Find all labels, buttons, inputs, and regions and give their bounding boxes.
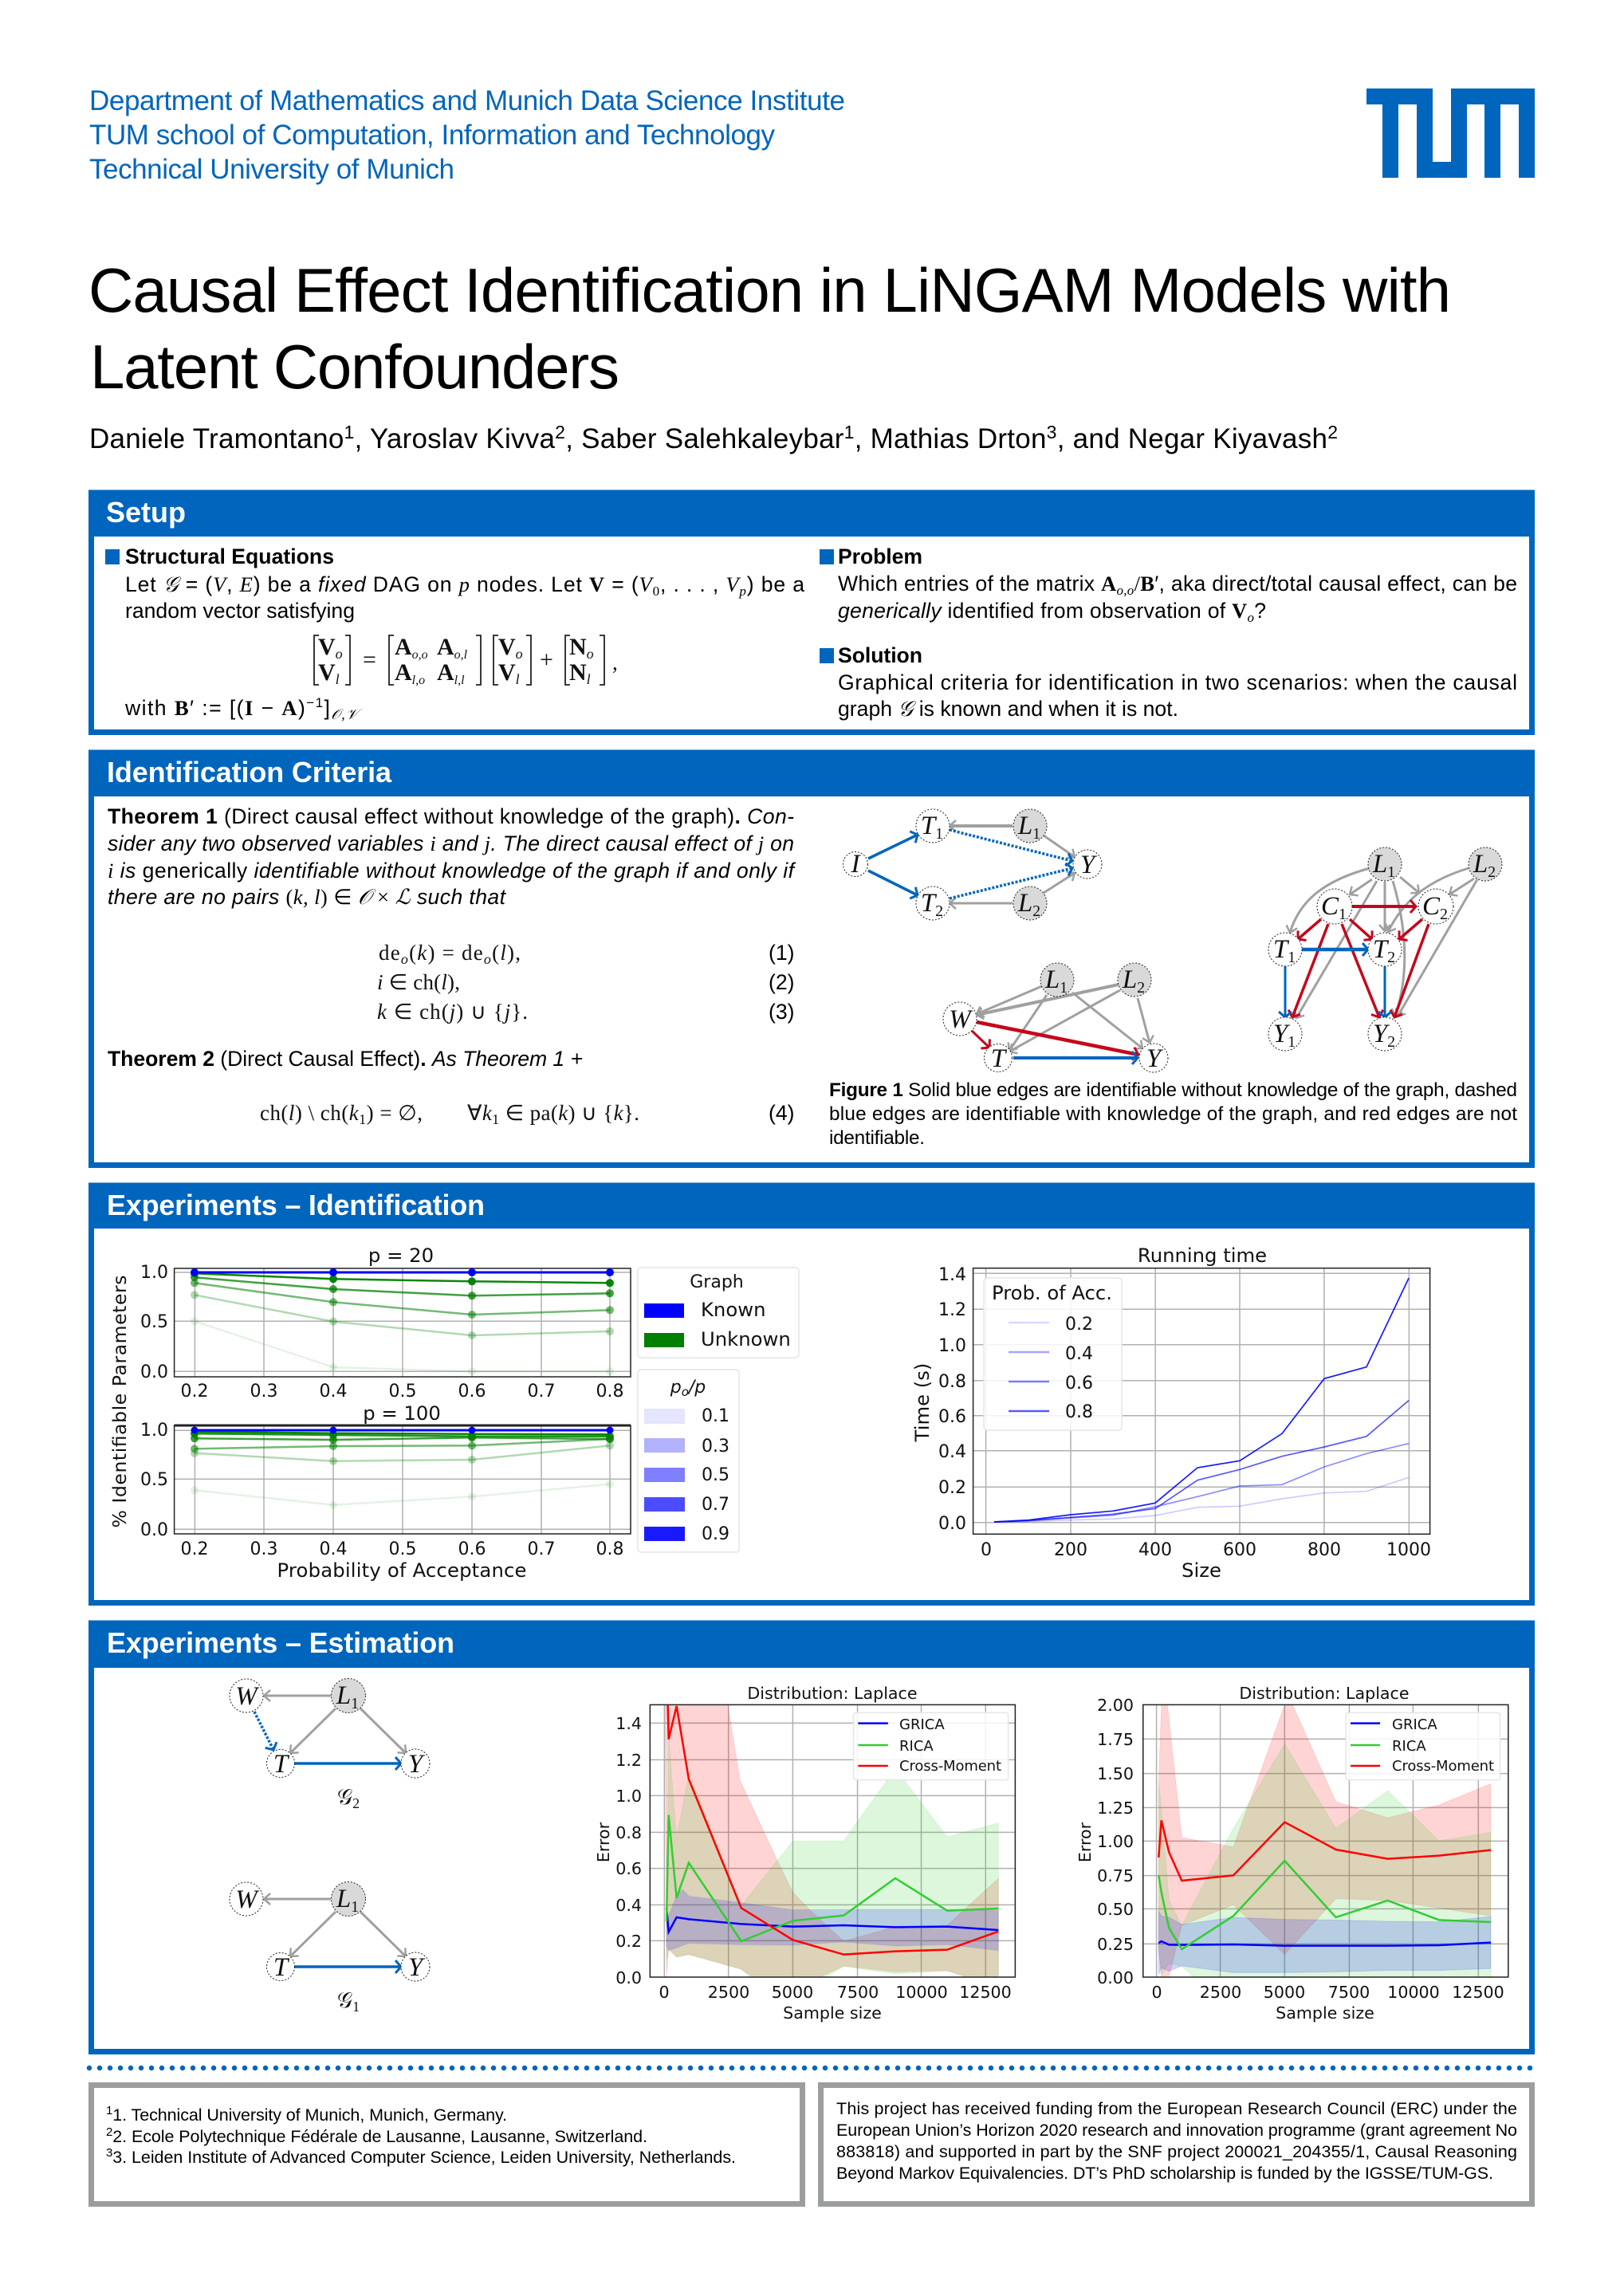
graph: G2: T (273, 1750, 290, 1779)
graph: top-left IV: T (921, 889, 935, 918)
graph: G1: T (273, 1953, 290, 1982)
authors: 3 (1047, 422, 1056, 442)
affiliation header (89, 85, 845, 185)
block: structural equations: ] (324, 696, 330, 720)
chart: laplace error 2: Sample size (1276, 2003, 1374, 2023)
legend: graph: Graph (690, 1272, 744, 1292)
footer: funding: European Union’s Horizon 2020 research and innovation programme (grant agreement No (836, 2121, 1517, 2140)
block: problem (820, 545, 1517, 625)
chart: laplace error 2: 2.00 (1097, 1696, 1134, 1715)
chart: p = 100: 0.2 (180, 1539, 209, 1559)
block: problem: generically identified from observation of V (838, 599, 1247, 623)
chart: p = 100: 0.3 (250, 1539, 277, 1559)
legend: po/p: /p (687, 1378, 706, 1398)
equation: structural matrix: N (569, 659, 587, 686)
equation 4: ) = ∅, (367, 1101, 423, 1125)
block: problem: B′, aka direct/total causal effect, can be (1140, 572, 1517, 596)
equation: structural matrix: o (516, 646, 523, 662)
footer: funding: 883818) and supported in part by the SNF project 200021_204355/1, Causal Reasoning (836, 2142, 1517, 2161)
graph: G1: 1 (351, 1898, 359, 1916)
chart: p = 20: 0.6 (458, 1382, 486, 1402)
chart: laplace error 1: 0.6 (615, 1859, 642, 1878)
chart: running time: 600 (1223, 1540, 1256, 1560)
title (88, 255, 1451, 402)
footer: funding (821, 2086, 1532, 2204)
equations 1 to 3: i ∈ ch(l), (377, 970, 460, 994)
chart: p = 100: 0.7 (528, 1539, 555, 1559)
figure caption: blue edges are identifiable with knowledge of the graph, and red edges are not (829, 1103, 1517, 1125)
authors: 2 (555, 422, 565, 442)
chart: laplace error 1: 2500 (708, 1983, 749, 2002)
chart: running time: Running time (1138, 1244, 1267, 1267)
chart: p = 100: Probability of Acceptance (277, 1559, 526, 1582)
chart: p = 100: 0.8 (596, 1539, 623, 1559)
legend: probability of acceptance: 0.4 (1065, 1344, 1093, 1364)
theorem 2: Theorem 2 (Direct Causal Effect). As Theorem 1 + (108, 1047, 583, 1071)
legend: probability of acceptance: 0.6 (1065, 1374, 1093, 1394)
graph: right C T Y: 1 (1288, 949, 1296, 966)
block: structural equations: with B′ := [(I − A) (125, 696, 305, 720)
equations 1 to 3: k ∈ ch(j) ∪ {j}. (377, 1000, 528, 1024)
graph: G2 (230, 1679, 430, 1811)
theorem 1: there are no pairs (k, l) ∈ 𝒪 × ℒ such that (108, 885, 507, 909)
chart: laplace error 1: Distribution: Laplace (747, 1684, 918, 1703)
figure caption (829, 1079, 1517, 1149)
chart: laplace error 2: 12500 (1452, 1983, 1504, 2002)
graph: right C T Y: 2 (1387, 1033, 1395, 1051)
heading: experiments estimation: Experiments – Estimation (107, 1626, 454, 1659)
footer: affiliations: 1. Technical University of Munich, Munich, Germany. (112, 2105, 507, 2125)
authors: , Mathias Drton (855, 423, 1046, 454)
legend: po/p: 0.9 (702, 1524, 729, 1544)
graph: bottom W T Y: L (1045, 965, 1060, 994)
panel: identification criteria (88, 749, 1535, 1166)
chart: running time: Size (1182, 1559, 1221, 1582)
equation: structural matrix: l (516, 671, 520, 687)
chart: laplace error 1: 0.8 (615, 1823, 642, 1842)
graph: right C T Y: Y (1373, 1020, 1387, 1048)
chart: running time: 0.2 (938, 1478, 966, 1498)
graph: G1: W (235, 1885, 259, 1914)
chart: p = 20: p = 20 (368, 1244, 434, 1267)
graph: bottom W T Y (943, 963, 1168, 1073)
equation: structural matrix: = (363, 647, 376, 673)
graph: top-left IV: L (1018, 812, 1032, 840)
chart: laplace error 1: 1.4 (615, 1714, 642, 1733)
chart: p = 100: 0.5 (140, 1470, 168, 1490)
graph: top-left IV: Y (1080, 851, 1098, 879)
block: solution: Graphical criteria for identification in two scenarios: when the causal (838, 670, 1517, 694)
legend: po/p: 0.5 (702, 1465, 729, 1485)
panel: setup (88, 489, 1535, 732)
chart: laplace error 1: 7500 (837, 1983, 879, 2002)
title: Latent Confounders (90, 332, 619, 402)
block: structural equations: −1 (306, 695, 323, 710)
equation 4: 1 (359, 1111, 366, 1127)
chart: laplace error 2: 0 (1151, 1983, 1162, 2002)
chart: running time: 400 (1138, 1540, 1172, 1560)
authors: 2 (1327, 422, 1338, 442)
legend: po/p: 0.3 (702, 1437, 729, 1457)
graph: G2: L (336, 1681, 351, 1710)
chart: running time: 800 (1307, 1540, 1341, 1560)
chart: laplace error 2: GRICA (1392, 1716, 1437, 1733)
block: problem: ? (1254, 599, 1266, 623)
authors: , and Negar Kiyavash (1057, 423, 1327, 454)
equations 1 to 3: de (379, 941, 400, 965)
figure caption: identifiable. (829, 1127, 925, 1149)
legend: graph: Known (701, 1298, 765, 1321)
footer: affiliations (91, 2086, 802, 2204)
affiliation header: Technical University of Munich (89, 154, 454, 185)
graph: G2: W (235, 1682, 259, 1711)
equation: structural matrix: o (336, 646, 343, 662)
block: problem: / (1134, 572, 1141, 596)
graph: top-left IV: 2 (935, 902, 943, 920)
legend: po/p: o (682, 1385, 689, 1399)
chart: laplace error 1: 0 (659, 1983, 670, 2002)
legend: po/p: 0.7 (702, 1495, 729, 1515)
heading: identification criteria: Identification Criteria (107, 756, 392, 788)
graph: top-left IV: 1 (935, 825, 943, 843)
chart: p = 20: 0.3 (250, 1382, 277, 1402)
chart: laplace error 2: Distribution: Laplace (1239, 1684, 1410, 1703)
graph: bottom W T Y: T (991, 1044, 1008, 1073)
block: structural equations: ) be a (747, 572, 804, 596)
graph: right C T Y: C (1422, 892, 1440, 921)
chart: laplace error 1 (594, 1677, 1015, 2023)
block: problem: Which entries of the matrix A (838, 572, 1116, 596)
authors: 1 (344, 422, 354, 442)
chart: laplace error 1: 0.4 (615, 1896, 642, 1915)
equations 1 to 3: ( (409, 941, 416, 965)
chart: p = 20: 0.0 (140, 1362, 168, 1382)
graph: right C T Y: T (1373, 935, 1387, 964)
equation: structural matrix: A (437, 659, 454, 686)
graph: right C T Y: 2 (1488, 863, 1496, 881)
chart: running time (910, 1244, 1431, 1582)
graph: right C T Y: Y (1273, 1020, 1288, 1048)
legend: po/p: 0.1 (702, 1406, 729, 1426)
chart: p = 20: 0.5 (389, 1382, 416, 1402)
chart: p = 20: 0.4 (319, 1382, 348, 1402)
chart: laplace error 2: 1.25 (1097, 1799, 1134, 1818)
equation: structural matrix: V (498, 659, 516, 686)
equation: structural matrix: l,l (454, 674, 465, 687)
graph: right C T Y: L (1473, 850, 1488, 879)
chart: p = 20: 0.5 (140, 1312, 168, 1332)
equation: structural matrix: N (569, 634, 587, 660)
chart: p = 100: 0.0 (140, 1520, 168, 1540)
graph: top-left IV: I (850, 850, 861, 879)
block: structural equations: p (738, 584, 746, 599)
chart: p = 20 (140, 1244, 631, 1402)
chart: laplace error 1: 5000 (772, 1983, 813, 2002)
chart: laplace error 2: Error (1075, 1822, 1095, 1862)
footer: affiliations: 1 (106, 2104, 112, 2117)
legend: probability of acceptance (984, 1278, 1122, 1430)
graph: right C T Y: L (1373, 850, 1387, 879)
graph: G2: Y (408, 1750, 426, 1779)
chart: running time: 1.4 (938, 1265, 966, 1285)
block: structural equations: V (725, 572, 741, 596)
title: Causal Effect Identification in LiNGAM Models with (88, 255, 1451, 325)
legend: probability of acceptance: 0.2 (1065, 1315, 1093, 1335)
equations 1 to 3 (377, 941, 795, 1024)
panel: experiments identification (88, 1183, 1535, 1602)
authors: , Saber Salehkaleybar (565, 423, 844, 454)
chart: laplace error 2: 0.25 (1097, 1935, 1134, 1954)
chart: running time: 200 (1054, 1540, 1087, 1560)
chart: laplace error 1: Sample size (783, 2003, 882, 2023)
graph: right C T Y: 1 (1387, 863, 1395, 881)
chart: laplace error 1: 1.0 (615, 1787, 642, 1806)
chart: p = 100: 1.0 (140, 1421, 168, 1441)
equation: structural matrix: + (540, 647, 553, 673)
block: structural equations: 𝒪,𝒱 (331, 706, 363, 722)
chart: running time: 0.4 (938, 1442, 966, 1462)
chart: running time: 0 (981, 1540, 992, 1560)
block: structural equations: Let 𝒢 = (V, E) be a fixed DAG on p nodes. Let V = (V (125, 572, 652, 596)
chart: laplace error 2: 10000 (1387, 1983, 1440, 2002)
authors: 1 (844, 422, 854, 442)
equations 1 to 3: l), (500, 941, 521, 965)
block: solution: graph 𝒢 is known and when it is not. (838, 697, 1178, 721)
chart: p = 20: 1.0 (140, 1263, 168, 1283)
chart: p = 100: 0.4 (319, 1539, 348, 1559)
chart: running time: 1.0 (938, 1336, 966, 1356)
chart: laplace error 1: 12500 (959, 1983, 1012, 2002)
graph: bottom W T Y: W (949, 1005, 973, 1034)
graph: G1: 1 (352, 1999, 360, 2015)
equations 1 to 3: k) = de (417, 941, 483, 965)
equation: structural matrix: V (318, 659, 336, 686)
chart: laplace error 1: 0.2 (615, 1932, 642, 1951)
graph: right C T Y: C (1321, 892, 1339, 921)
chart: laplace error 1: RICA (899, 1738, 934, 1755)
graph: bottom W T Y: Y (1146, 1044, 1164, 1073)
chart: running time: 0.0 (938, 1514, 966, 1534)
equations 1 to 3: ( (492, 941, 499, 965)
graph: right C T Y: T (1273, 935, 1288, 964)
chart: p = 100: 0.6 (458, 1539, 486, 1559)
graph: top-left IV: 2 (1032, 902, 1040, 920)
equation: structural matrix: , (612, 651, 618, 674)
chart: laplace error 2: RICA (1392, 1738, 1426, 1755)
heading: experiments identification: Experiments – Identification (107, 1189, 485, 1221)
equations 1 to 3: o (401, 951, 408, 967)
chart: laplace error 1: 10000 (895, 1983, 948, 2002)
chart: laplace error 1: 0.0 (615, 1968, 642, 1987)
chart: p = 20: 0.8 (596, 1382, 623, 1402)
equation: structural matrix (314, 634, 618, 687)
panel: experiments estimation (88, 1620, 1535, 2052)
authors: Daniele Tramontano (89, 423, 344, 454)
block: structural equations (105, 545, 804, 722)
block: structural equations: 0 (653, 584, 659, 599)
graph: G1 (230, 1881, 430, 2015)
chart: laplace error 1: GRICA (899, 1716, 945, 1733)
affiliation header: Department of Mathematics and Munich Data Science Institute (89, 85, 845, 116)
chart: laplace error 2: 1.50 (1097, 1764, 1134, 1783)
chart: laplace error 1: 1.2 (615, 1751, 642, 1770)
equation: structural matrix: V (498, 634, 516, 660)
equation: structural matrix: l,o (412, 674, 425, 687)
chart: laplace error 2: Cross-Moment (1392, 1758, 1494, 1775)
equation 4: ch(l) \ ch(k (260, 1101, 359, 1125)
footer: affiliations: 2 (106, 2125, 112, 2139)
theorem 1 (108, 804, 796, 909)
equation: structural matrix: l (336, 671, 340, 687)
equation 4: (4) (769, 1101, 795, 1125)
authors: , Yaroslav Kivva (355, 423, 555, 454)
block: structural equations: Structural Equations (125, 545, 334, 568)
chart: p = 100 (140, 1402, 631, 1582)
graph: G1: L (336, 1885, 351, 1913)
heading: setup: Setup (106, 496, 186, 529)
legend: probability of acceptance: 0.8 (1065, 1402, 1093, 1422)
graph: top-left IV: 1 (1032, 825, 1040, 843)
footer: affiliations: 3 (106, 2146, 112, 2160)
theorem 1: Theorem 1 (Direct causal effect without knowledge of the graph). Con- (108, 804, 794, 828)
chart: p = 100: p = 100 (363, 1402, 441, 1425)
chart: running time: 1.2 (938, 1300, 966, 1320)
graph: G1: 𝒢 (337, 1988, 352, 2012)
chart: laplace error 1: Error (594, 1822, 613, 1862)
legend: po/p: p (670, 1378, 682, 1398)
legend: graph (638, 1268, 799, 1358)
footer: funding: Beyond Markov Equivalencies. DT’s PhD scholarship is funded by the IGSSE/TUM-GS. (836, 2164, 1493, 2183)
equation: structural matrix: o,o (412, 648, 428, 662)
graph: right C T Y: 2 (1440, 906, 1448, 923)
equations 1 to 3: (2) (769, 970, 795, 994)
theorem 1: i is generically identifiable without knowledge of the graph if and only if (108, 859, 796, 883)
block: solution (820, 643, 1517, 721)
graph: right C T Y: 2 (1387, 949, 1395, 966)
footer: affiliations: 2. Ecole Polytechnique Fédérale de Lausanne, Lausanne, Switzerland. (112, 2127, 647, 2146)
figure caption: Figure 1 Solid blue edges are identifiable without knowledge of the graph, dashed (829, 1079, 1517, 1101)
equations 1 to 3: (1) (769, 941, 795, 965)
chart: laplace error 2: 7500 (1328, 1983, 1370, 2002)
chart: laplace error 2 (1075, 1684, 1508, 2023)
chart: running time: 0.8 (938, 1372, 966, 1392)
chart: running time: 0.6 (938, 1407, 966, 1427)
chart: laplace error 2: 5000 (1264, 1983, 1305, 2002)
graph: G2: 𝒢 (337, 1785, 352, 1809)
legend: po/p (638, 1370, 739, 1552)
equation 4: 1 (492, 1111, 499, 1127)
chart: running time: 1000 (1386, 1540, 1431, 1560)
chart: laplace error 1: Cross-Moment (899, 1758, 1001, 1775)
equation: structural matrix: V (318, 634, 336, 660)
chart: laplace error 2: 0.00 (1097, 1968, 1134, 1987)
graph: right C T Y (1268, 847, 1502, 1051)
equation 4: k) ∪ {k}. (558, 1101, 639, 1125)
equation: structural matrix: l (587, 671, 591, 687)
equation: structural matrix: o (587, 646, 594, 662)
legend: probability of acceptance: Prob. of Acc. (992, 1281, 1112, 1304)
graph: G1: Y (408, 1953, 426, 1982)
block: problem: o (1247, 610, 1254, 625)
chart: p = 20: 0.7 (528, 1382, 555, 1402)
block: problem: Problem (838, 545, 922, 568)
equation: structural matrix: A (395, 659, 412, 686)
legend: graph: Unknown (701, 1327, 791, 1350)
graph: top-left IV (843, 809, 1102, 920)
graph: G2: 2 (352, 1795, 360, 1811)
equation: structural matrix: A (395, 634, 412, 660)
chart: laplace error 2: 1.00 (1097, 1832, 1134, 1851)
icon: TUM logo (1366, 88, 1535, 178)
graph: bottom W T Y: 2 (1137, 979, 1145, 997)
graph: top-left IV: L (1018, 889, 1032, 918)
graph: right C T Y: 1 (1288, 1033, 1296, 1051)
graph: top-left IV: T (921, 812, 935, 840)
equations 1 to 3: (3) (769, 1000, 795, 1024)
chart: p = 100: 0.5 (389, 1539, 416, 1559)
block: structural equations: random vector satisfying (125, 599, 355, 623)
axis label: percent identifiable: % Identifiable Parameters (108, 1276, 131, 1527)
footer: affiliations: 3. Leiden Institute of Advanced Computer Science, Leiden University, Netherlands. (112, 2148, 736, 2167)
block: problem: o,o (1117, 583, 1134, 598)
equation 4: ∈ pa( (500, 1101, 558, 1125)
block: solution: Solution (838, 643, 922, 667)
chart: running time: Time (s) (910, 1363, 934, 1442)
graph: G2: 1 (351, 1695, 359, 1712)
graph: right C T Y: 1 (1339, 906, 1347, 923)
block: structural equations: , . . . , (660, 572, 725, 596)
chart: laplace error 2: 2500 (1200, 1983, 1241, 2002)
equation 4 (260, 1101, 795, 1127)
equation: structural matrix: o,l (454, 648, 468, 662)
equations 1 to 3: o (484, 951, 491, 967)
equation 4: ∀k (467, 1101, 492, 1125)
graph: bottom W T Y: 1 (1060, 979, 1068, 997)
equation: structural matrix: A (437, 634, 454, 660)
graph: bottom W T Y: L (1123, 965, 1137, 994)
affiliation header: TUM school of Computation, Information and Technology (89, 120, 775, 151)
chart: laplace error 2: 1.75 (1097, 1730, 1134, 1749)
theorem 1: sider any two observed variables i and j. The direct causal effect of j on (108, 832, 794, 855)
chart: laplace error 2: 0.75 (1097, 1866, 1134, 1885)
chart: laplace error 2: 0.50 (1097, 1900, 1134, 1919)
footer: funding: This project has received funding from the European Research Council (ERC) under the (836, 2099, 1517, 2118)
chart: p = 20: 0.2 (180, 1382, 209, 1402)
